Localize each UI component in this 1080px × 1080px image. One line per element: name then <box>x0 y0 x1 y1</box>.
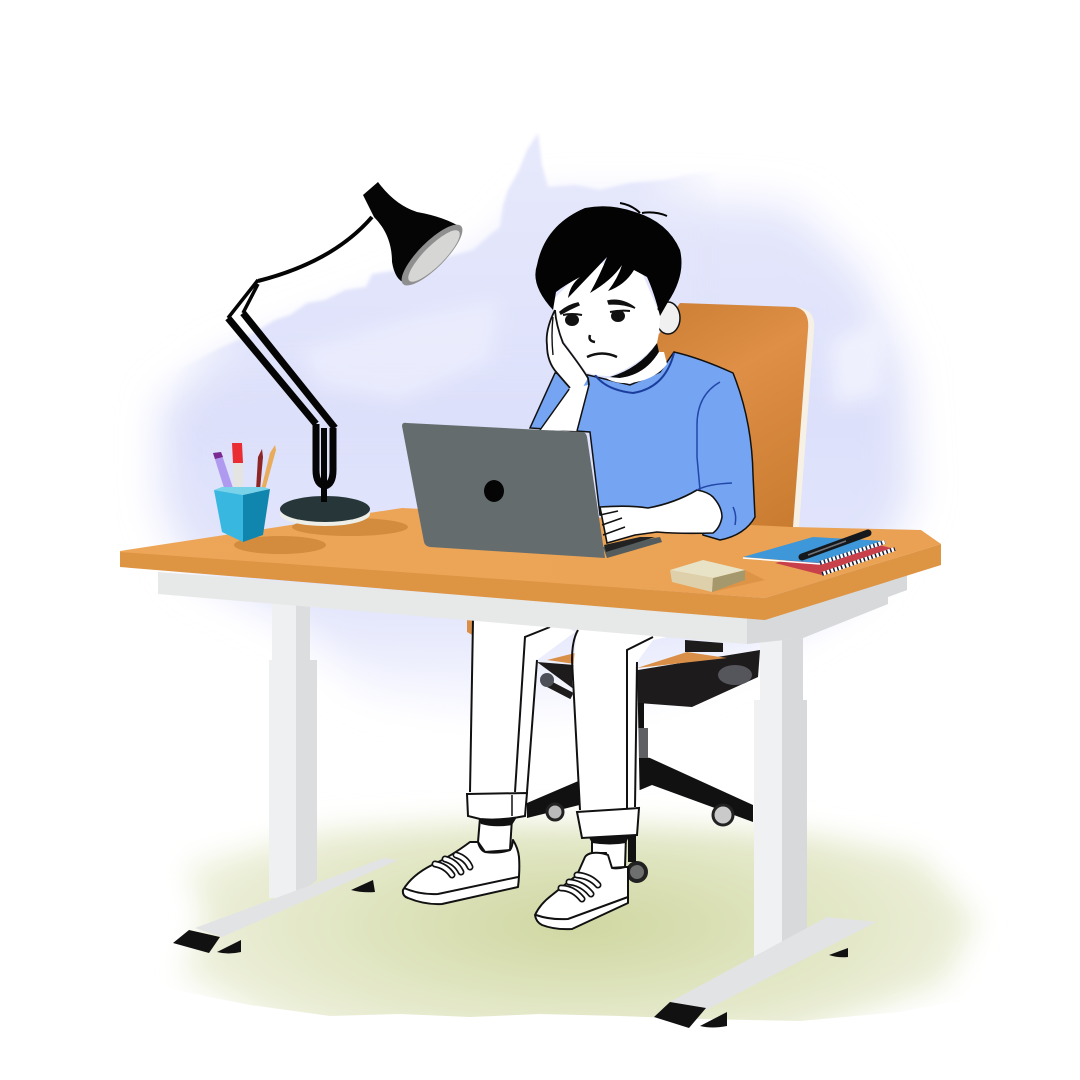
forearm and hand <box>600 490 722 543</box>
lamp <box>228 182 470 526</box>
right cuff <box>577 808 639 838</box>
raised forearm <box>540 385 589 431</box>
desk leg left <box>269 590 317 898</box>
right eyebrow <box>608 300 635 308</box>
left sock band <box>478 817 517 826</box>
desk surface <box>120 508 941 598</box>
sweater <box>530 352 755 540</box>
logo <box>484 480 504 502</box>
hair <box>535 206 682 316</box>
screen <box>402 423 605 558</box>
chair edge behind left leg <box>467 620 478 637</box>
right sock <box>592 836 626 868</box>
hand on cheek <box>547 310 588 392</box>
lamp base <box>280 502 370 526</box>
laptop <box>402 423 736 558</box>
left armrest lever <box>545 682 572 696</box>
sleeve cuff lines <box>697 483 736 525</box>
fingers <box>600 511 625 535</box>
left shoe <box>403 840 519 904</box>
desk top <box>120 508 941 644</box>
desk leg right <box>754 630 807 964</box>
sleeve seam <box>697 382 720 490</box>
casters <box>713 805 733 825</box>
desk <box>173 590 876 1028</box>
boy: torso <box>530 343 755 540</box>
left leg <box>470 620 575 792</box>
desk foot left <box>195 858 398 937</box>
keyboard base <box>603 537 662 558</box>
notebooks and pen <box>743 533 895 575</box>
ear <box>656 302 680 334</box>
nose <box>590 335 595 342</box>
left sock <box>478 818 512 852</box>
left eye <box>563 314 582 315</box>
desk frame <box>158 572 907 644</box>
cup shadow <box>234 536 326 554</box>
chair column and base <box>527 703 753 822</box>
lamp shadow <box>292 518 408 536</box>
background: green floor wash <box>180 822 978 1040</box>
lamp shade <box>363 182 462 283</box>
stray hairs <box>620 203 667 216</box>
right shoe laces <box>561 875 598 899</box>
right leg <box>572 628 690 810</box>
boy: trousers and shoes <box>403 620 690 929</box>
neck shadow <box>610 343 659 378</box>
boy: head <box>535 203 682 392</box>
pencil cup <box>213 443 276 542</box>
red marker <box>233 463 243 491</box>
collar <box>606 352 667 383</box>
illustration: tired boy at desk <box>120 135 982 1028</box>
red notebook <box>775 540 895 575</box>
right eye <box>610 311 630 312</box>
mouth <box>587 354 617 357</box>
desk front edge <box>120 544 941 620</box>
chair back <box>661 304 814 546</box>
chair <box>527 303 814 881</box>
lamp arm <box>258 217 372 281</box>
sticky note pad <box>670 560 765 592</box>
left shoe laces <box>435 855 470 875</box>
right sock band <box>588 834 630 844</box>
purple marker <box>213 452 234 491</box>
red pencil <box>256 449 263 490</box>
orange pencil <box>261 445 276 490</box>
face <box>553 262 660 376</box>
right shoe <box>535 853 628 929</box>
left eyebrow <box>560 303 579 314</box>
pen <box>802 533 868 557</box>
desk foot right <box>670 917 876 1010</box>
background: lavender wash <box>152 133 912 715</box>
left cuff <box>467 793 527 820</box>
cup <box>214 487 270 495</box>
blue notebook <box>743 537 885 563</box>
chair seat <box>537 650 760 707</box>
